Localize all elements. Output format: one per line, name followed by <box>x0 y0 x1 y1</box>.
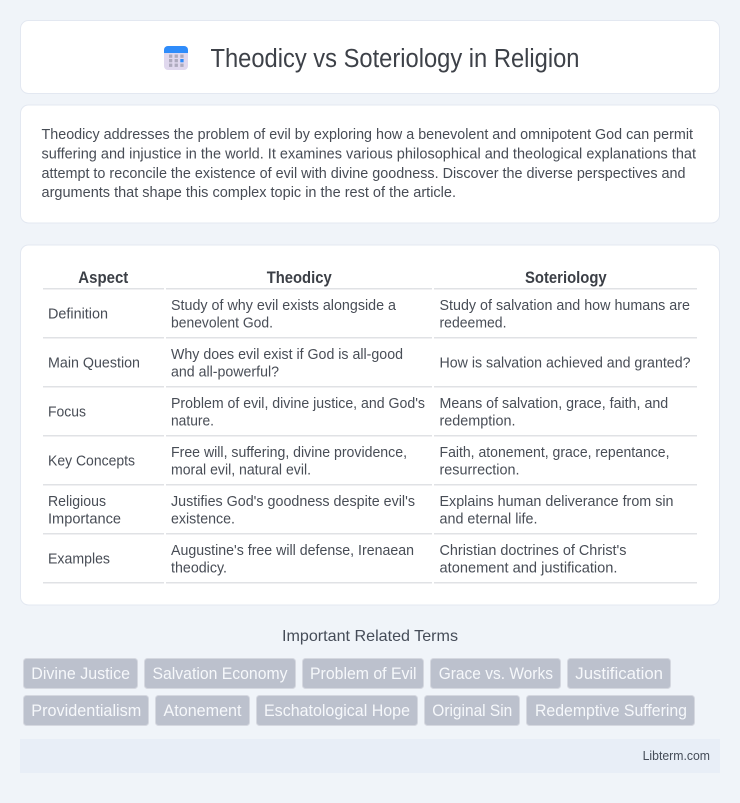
chip: eschatological hope: Eschatological Hope <box>264 701 410 720</box>
intro paragraph: arguments that shape this complex topic in the rest of the article. <box>42 184 456 201</box>
chip: redemptive suffering <box>526 696 694 726</box>
panel: title card <box>20 20 720 94</box>
heading: related terms: Important Related Terms <box>282 628 458 645</box>
related term chips <box>24 658 694 726</box>
footer credit: Libterm.com <box>643 748 710 763</box>
row: religious importance <box>43 494 697 534</box>
row: definition: Definition <box>48 307 108 323</box>
chip: providentialism: Providentialism <box>31 701 141 720</box>
row: definition: Study of why evil exists alongside a <box>171 298 397 314</box>
row: focus: nature. <box>171 414 214 430</box>
chip: divine justice: Divine Justice <box>31 664 130 683</box>
row: focus: Means of salvation, grace, faith, and <box>440 396 668 412</box>
chip: salvation economy <box>144 658 296 688</box>
footer bar <box>20 739 720 773</box>
chip: problem of evil <box>302 658 424 688</box>
panel: comparison table <box>20 245 720 605</box>
row: religious importance: Importance <box>48 512 121 528</box>
row: main question: Why does evil exist if God is all-good <box>171 347 403 363</box>
row: focus <box>43 396 697 436</box>
row: examples: Augustine's free will defense, Irenaean <box>171 543 414 559</box>
table header: Aspect <box>78 268 129 287</box>
row: main question: Main Question <box>48 356 140 372</box>
row: religious importance: Religious <box>48 494 106 510</box>
row: focus: Focus <box>48 405 86 421</box>
chip: redemptive suffering: Redemptive Suffering <box>535 701 687 720</box>
chip: original sin: Original Sin <box>432 701 512 720</box>
table header <box>43 268 697 290</box>
row: key concepts: moral evil, natural evil. <box>171 463 311 479</box>
title: Theodicy vs Soteriology in Religion <box>210 45 580 73</box>
row: key concepts: Faith, atonement, grace, repentance, <box>440 445 670 461</box>
row: focus: Problem of evil, divine justice, and God's <box>171 396 425 412</box>
row: examples: Christian doctrines of Christ's <box>440 543 626 559</box>
row: definition: benevolent God. <box>171 316 273 332</box>
row: main question: and all-powerful? <box>171 365 279 381</box>
intro paragraph: attempt to reconcile the existence of evil with divine goodness. Discover the diverse perspectives and <box>42 165 686 182</box>
icon: calendar <box>164 46 188 70</box>
intro paragraph: Theodicy addresses the problem of evil by exploring how a benevolent and omnipotent God can permit <box>42 126 694 143</box>
chip: salvation economy: Salvation Economy <box>152 664 288 683</box>
chip: justification <box>568 658 670 688</box>
table header: Theodicy <box>267 268 332 287</box>
table header: Soteriology <box>525 268 607 287</box>
row: key concepts: resurrection. <box>440 463 520 479</box>
row: key concepts: Free will, suffering, divine providence, <box>171 445 407 461</box>
chip: providentialism <box>24 696 148 726</box>
chip: justification: Justification <box>575 664 663 683</box>
row: key concepts: Key Concepts <box>48 454 135 470</box>
row: examples <box>43 543 697 584</box>
row: religious importance: Justifies God's goodness despite evil's <box>171 494 415 510</box>
chip: grace vs. works <box>430 658 560 688</box>
chip: original sin <box>424 696 520 726</box>
chip: divine justice <box>24 658 138 688</box>
chip: grace vs. works: Grace vs. Works <box>439 664 553 683</box>
intro paragraph <box>42 126 697 201</box>
chip: problem of evil: Problem of Evil <box>310 664 416 683</box>
row: definition <box>43 298 697 338</box>
row: religious importance: and eternal life. <box>440 512 538 528</box>
row: focus: redemption. <box>440 414 516 430</box>
panel: introduction <box>20 105 720 223</box>
row: religious importance: existence. <box>171 512 235 528</box>
row: examples: theodicy. <box>171 561 227 577</box>
row: examples: atonement and justification. <box>440 561 618 577</box>
row: main question: How is salvation achieved and granted? <box>440 356 690 372</box>
row: religious importance: Explains human deliverance from sin <box>440 494 674 510</box>
chip: eschatological hope <box>256 696 418 726</box>
row: definition: redeemed. <box>440 316 506 332</box>
row: definition: Study of salvation and how humans are <box>440 298 690 314</box>
chip: atonement: Atonement <box>164 701 242 720</box>
row: main question <box>43 347 697 388</box>
chip: atonement <box>156 696 250 726</box>
row: examples: Examples <box>48 552 110 568</box>
intro paragraph: suffering and injustice in the world. It examines various philosophical and theological explanations that <box>42 146 697 162</box>
row: key concepts <box>43 445 697 486</box>
